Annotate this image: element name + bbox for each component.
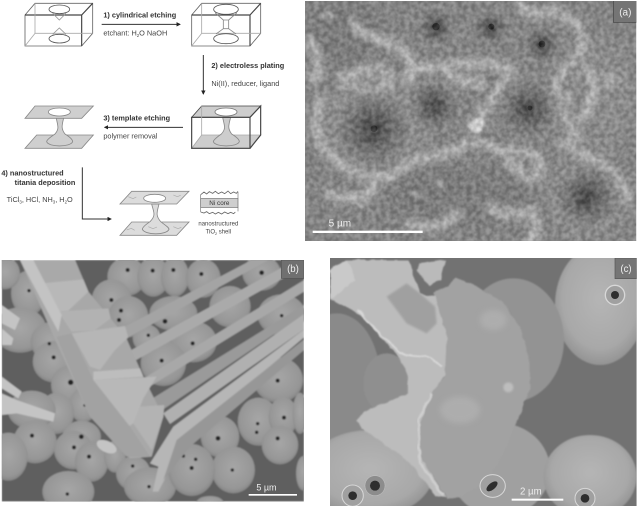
- crater: [340, 88, 407, 162]
- icon: free-standing structure: [25, 106, 93, 148]
- surface texture: [305, 1, 636, 241]
- strip: [125, 260, 268, 337]
- backbone: [93, 381, 129, 457]
- pore: [575, 488, 595, 507]
- crater: [506, 87, 560, 132]
- step labels: [1, 11, 284, 236]
- sphere: [463, 278, 564, 402]
- icon: Ni core cross-section: [201, 191, 238, 214]
- pore: [480, 475, 505, 497]
- fin: [93, 368, 143, 380]
- icon: template box step 1: [25, 3, 93, 46]
- label: reagents: Ni(II), reducer, ligand: [211, 79, 279, 88]
- crater pores: [371, 23, 545, 132]
- scale bar: 5 um: 5 µm: [329, 219, 351, 230]
- strip: [163, 314, 304, 424]
- strip: [163, 339, 304, 480]
- scale bar: 2 um: [512, 487, 563, 501]
- fin: [20, 260, 88, 312]
- scale bar: 2 um: 2 µm: [520, 487, 542, 498]
- broken fragments: [2, 305, 119, 456]
- label: titania reagents: TiCl: [7, 195, 19, 204]
- pore: [342, 485, 363, 506]
- arrow: step 1: [102, 23, 180, 26]
- label: step 1: 1) cylindrical etching: [103, 11, 176, 20]
- long strips: [125, 260, 304, 492]
- fin: [46, 280, 88, 311]
- Ni core label: Ni core: [209, 200, 230, 207]
- sphere: [450, 423, 550, 507]
- arrow: step 3: [105, 126, 183, 129]
- sphere: [307, 430, 433, 507]
- crater: [477, 14, 504, 41]
- label: titania reagents: 2: [65, 200, 68, 205]
- spherical lobes: [0, 256, 311, 507]
- label: shell line 2: TiO: [206, 230, 215, 236]
- lobe pores: [27, 268, 286, 496]
- label: titania reagents: O: [67, 195, 73, 204]
- sphere: [543, 435, 637, 507]
- bright rough ridges: [310, 7, 628, 238]
- crater: [528, 31, 556, 59]
- label: etchant: etchant: H: [103, 28, 137, 37]
- craters: [340, 12, 620, 224]
- strip: [143, 305, 304, 409]
- arrow: step 2: [202, 55, 205, 94]
- fin: [58, 308, 111, 332]
- label box (b): [281, 260, 304, 278]
- strip: [150, 329, 304, 492]
- panel: SEM image (b): [0, 256, 311, 507]
- label: step 3: 3) template etching: [103, 113, 170, 122]
- label box (b): (b): [287, 264, 299, 275]
- label: step 4 second line: titania deposition: [15, 178, 76, 187]
- label: step 4: 4) nanostructured: [1, 168, 64, 177]
- fin base: [20, 260, 163, 458]
- arrow: step 4: [82, 167, 111, 219]
- label box (c): (c): [620, 264, 632, 275]
- icon: titania coated structure: [120, 191, 189, 235]
- label: polymer removal: polymer removal: [103, 132, 158, 141]
- fin: [72, 326, 128, 370]
- scale bar: 5 um: [313, 219, 423, 233]
- fin: [93, 377, 157, 427]
- crater: [412, 87, 454, 127]
- pore: [605, 285, 625, 305]
- granular nodules: [323, 10, 618, 218]
- background spheres: [293, 245, 637, 507]
- pore: [365, 476, 385, 496]
- label: shell: nanostructured: [198, 222, 238, 228]
- strip: [128, 267, 287, 362]
- icon: template box step 2: [192, 3, 261, 46]
- pores with rims: [342, 285, 625, 507]
- label: titania reagents: , H: [55, 195, 65, 204]
- label box (c): [615, 258, 637, 279]
- panel: SEM image (a): [305, 0, 637, 241]
- label: etchant: O NaOH: [139, 28, 167, 37]
- central fragment: [330, 260, 530, 500]
- backbone top: [20, 260, 62, 332]
- soft ridge glow: [310, 7, 628, 238]
- label: titania reagents: 3: [19, 200, 22, 205]
- label: titania reagents: , HCl, NH: [22, 195, 53, 204]
- label: etchant: 2: [137, 33, 140, 38]
- scale bar: 5 um: [249, 483, 297, 496]
- darker and lighter tonal regions: [315, 12, 636, 216]
- triangular fins and backbone: [20, 260, 164, 458]
- fin: [133, 405, 164, 450]
- sphere: [363, 353, 410, 413]
- panel: SEM image (c): [293, 245, 637, 507]
- scale bar: 5 um: 5 µm: [256, 483, 276, 493]
- crater: [560, 164, 620, 224]
- sphere: [293, 313, 380, 443]
- label: titania reagents: 3: [53, 200, 56, 205]
- strip: [147, 280, 304, 386]
- arrows: [82, 24, 203, 219]
- icon: plated box step 3: [192, 106, 261, 148]
- label: step 2: 2) electroless plating: [211, 61, 284, 70]
- label box (a): [613, 0, 637, 22]
- crater: [422, 12, 450, 42]
- label box (a): (a): [619, 7, 631, 18]
- panel: process schematic: [1, 3, 284, 236]
- label: shell line 2: 2: [215, 232, 217, 236]
- label: shell line 2: shell: [217, 230, 231, 236]
- sphere: [555, 245, 637, 365]
